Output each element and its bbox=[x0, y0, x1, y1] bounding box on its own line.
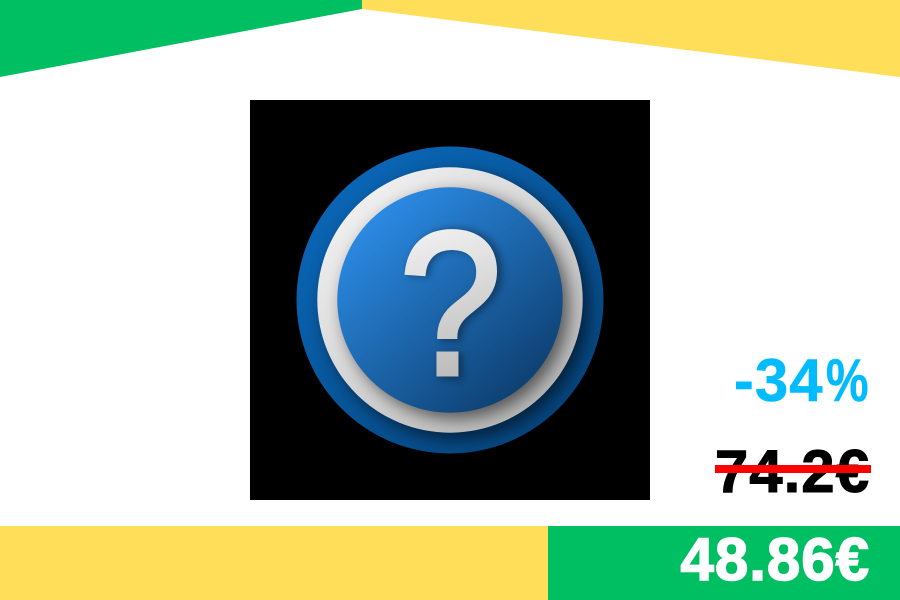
inner blue disc bbox=[337, 187, 563, 413]
question mark: ? bbox=[399, 190, 502, 418]
original price: 74.2€ bbox=[715, 438, 870, 505]
question mark shadow: ? bbox=[402, 188, 507, 421]
discount percentage: -34 bbox=[734, 347, 824, 414]
light ring bbox=[317, 167, 583, 433]
discount percentage: % bbox=[826, 347, 869, 414]
strikethrough line bbox=[715, 465, 871, 473]
bottom bar: green with sale price bbox=[548, 526, 900, 600]
top banner shapes bbox=[0, 0, 900, 77]
sale price: 48.86€ bbox=[680, 526, 870, 593]
discount percentage bbox=[734, 347, 869, 414]
icon: question mark on black square bbox=[250, 100, 650, 500]
outer blue disc bbox=[296, 146, 604, 454]
bottom bar: yellow bbox=[0, 526, 548, 600]
